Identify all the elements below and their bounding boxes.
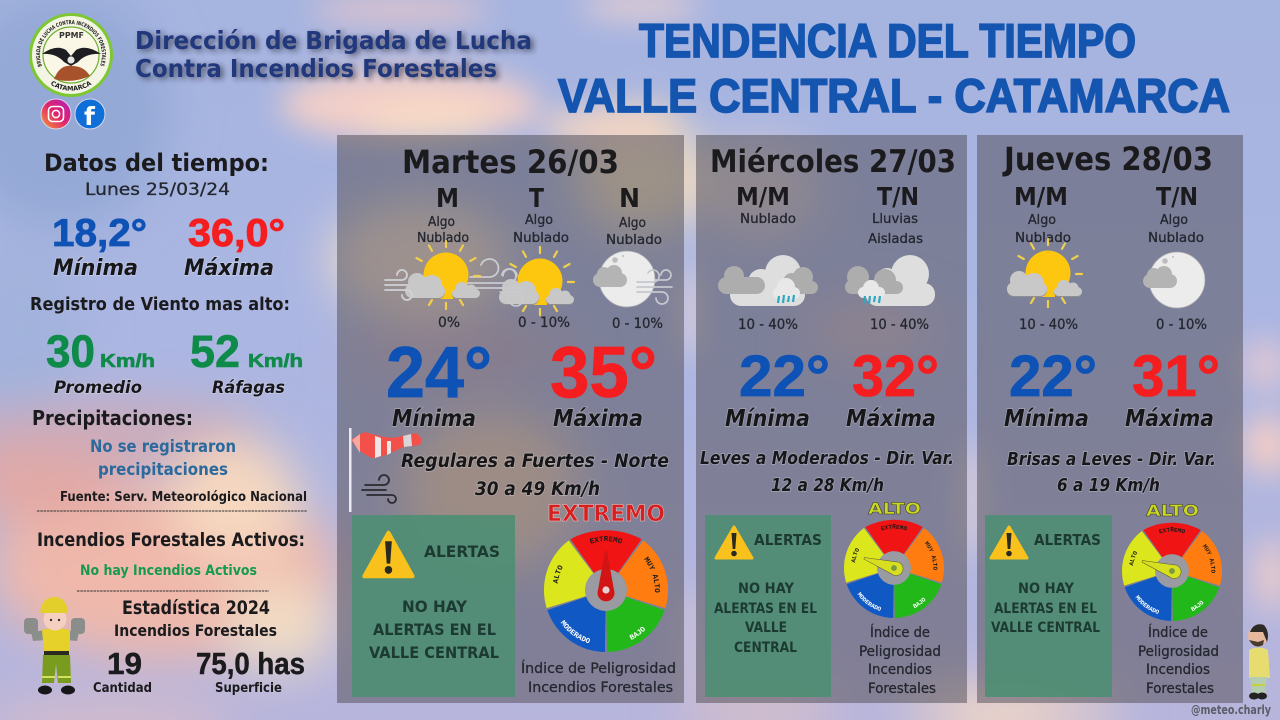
fire danger label: ALTO xyxy=(868,499,921,518)
precipitation text: precipitaciones xyxy=(98,460,228,479)
forecast: mañana: Nublado xyxy=(417,231,469,246)
title xyxy=(558,14,1230,122)
gauge: fire danger: MODERADO xyxy=(858,592,881,611)
heading: incendios activos: Incendios Forestales Activos: xyxy=(37,529,305,551)
max temperature: Máxima xyxy=(553,406,643,432)
forecast: manana mediodia: 10 - 40% xyxy=(738,317,798,333)
stat: cantidad: Cantidad xyxy=(93,681,152,696)
wind text xyxy=(401,451,669,500)
organisation heading: Contra Incendios Forestales xyxy=(135,54,497,83)
min temperature: 22° xyxy=(739,344,830,409)
wind text: 12 a 28 Km/h xyxy=(771,476,884,496)
alert text: CENTRAL xyxy=(734,640,797,656)
alert heading: ALERTAS xyxy=(754,531,822,549)
icon: facebook: f xyxy=(84,102,96,131)
alert heading: ALERTAS xyxy=(1034,531,1101,549)
forecast: mañana: M xyxy=(436,184,459,214)
alert text xyxy=(369,597,499,662)
temperature minimum: 18,2° xyxy=(52,212,147,255)
alert text: NO HAY xyxy=(402,597,467,616)
alert text: NO HAY xyxy=(1018,581,1075,597)
forecast: mañana: 0% xyxy=(438,315,460,331)
forecast: tarde noche xyxy=(1143,182,1207,333)
gauge caption: Incendios xyxy=(868,662,932,678)
forecast: tarde: 0 - 10% xyxy=(518,315,570,331)
alert text: VALLE xyxy=(745,620,787,636)
forecast: tarde noche: Lluvias xyxy=(872,212,918,227)
temperature minimum xyxy=(52,212,147,281)
wind average: Promedio xyxy=(54,378,142,398)
heading: datos del tiempo: Datos del tiempo: xyxy=(44,149,269,177)
max temperature: 35° xyxy=(550,333,657,413)
temperature maximum: Máxima xyxy=(184,256,274,281)
wind gusts: Ráfagas xyxy=(212,378,285,398)
gauge caption xyxy=(1138,624,1219,697)
alert box xyxy=(985,515,1112,697)
max temperature: Máxima xyxy=(846,406,936,432)
min temperature: 22° xyxy=(1009,344,1097,409)
wind text: 30 a 49 Km/h xyxy=(475,479,600,500)
gauge: fire danger xyxy=(1122,522,1222,621)
forecast: tarde: Algo xyxy=(525,213,553,228)
min temperature xyxy=(725,344,830,432)
logo: Brigada de Lucha: BRIGADA DE LUCHA CONTRA INCENDIOS FORESTALES xyxy=(36,20,106,67)
panel: datos del tiempo xyxy=(24,149,307,696)
gauge: fire danger: MUY ALTO xyxy=(924,541,938,570)
forecast: noche: 0 - 10% xyxy=(612,316,663,332)
gauge: fire danger xyxy=(544,530,668,652)
heading: precipitaciones: Precipitaciones: xyxy=(32,406,193,430)
min temperature: Mínima xyxy=(1004,406,1089,432)
panel: jueves xyxy=(977,135,1243,703)
icon: firefighter xyxy=(24,597,85,694)
gauge caption: Peligrosidad xyxy=(1138,644,1219,660)
heading: viento: Registro de Viento mas alto: xyxy=(30,294,290,315)
heading: Martes: Martes 26/03 xyxy=(402,143,619,181)
gauge: fire danger: MUY ALTO xyxy=(1202,544,1216,573)
forecast: manana mediodia: M/M xyxy=(736,182,790,211)
gauge: fire danger xyxy=(844,520,944,618)
gauge: fire danger: ALTO xyxy=(1129,551,1137,566)
gauge: fire danger: MUY ALTO xyxy=(644,556,660,592)
icon: facebook xyxy=(75,99,105,131)
forecast: tarde noche: 10 - 40% xyxy=(870,317,929,333)
organisation heading: Dirección de Brigada de Lucha xyxy=(135,26,532,55)
gauge caption: Incendios Forestales xyxy=(528,680,673,696)
gauge: fire danger: EXTREMO xyxy=(880,524,907,530)
gauge caption: Índice de xyxy=(870,624,930,641)
alert text: ALERTAS EN EL xyxy=(373,620,496,639)
active fires text: No hay Incendios Activos xyxy=(80,563,257,579)
max temperature: 31° xyxy=(1132,344,1220,409)
logo: Brigada de Lucha xyxy=(29,13,113,97)
alert text: VALLE CENTRAL xyxy=(369,643,499,662)
icon: warning triangle xyxy=(364,533,413,576)
gauge: fire danger: BAJO xyxy=(629,626,645,640)
gauge: fire danger: EXTREMO xyxy=(1158,527,1185,534)
gauge: fire danger: BAJO xyxy=(912,598,926,608)
forecast: tarde noche: T/N xyxy=(877,182,919,211)
forecast: manana mediodia: Algo xyxy=(1028,213,1056,228)
alert text: ALERTAS EN EL xyxy=(714,601,817,617)
max temperature: 32° xyxy=(852,344,939,409)
icon: warning triangle xyxy=(991,527,1027,558)
max temperature: Máxima xyxy=(1125,406,1214,432)
wind average: 30 xyxy=(46,326,95,377)
panel: miercoles xyxy=(696,135,967,703)
alert text: NO HAY xyxy=(738,581,795,597)
wind average xyxy=(46,326,155,398)
gauge caption: Peligrosidad xyxy=(859,644,941,660)
gauge: fire danger: MODERADO xyxy=(560,620,590,643)
gauge caption: Forestales xyxy=(1146,681,1214,697)
icon: windsock xyxy=(349,428,421,512)
forecast: noche: Nublado xyxy=(606,233,662,248)
alert text: VALLE CENTRAL xyxy=(991,620,1100,636)
gauge caption: Índice de Peligrosidad xyxy=(521,660,676,677)
wind text: 6 a 19 Km/h xyxy=(1057,476,1160,496)
forecast: noche: N xyxy=(619,184,640,214)
min temperature: 24° xyxy=(386,333,492,413)
wind text: Regulares a Fuertes - Norte xyxy=(401,451,669,472)
gauge: fire danger: BAJO xyxy=(1190,600,1204,612)
gauge: fire danger: MODERADO xyxy=(1136,595,1159,614)
precipitation text: No se registraron xyxy=(90,437,236,456)
min temperature: Mínima xyxy=(392,406,476,432)
wind text: Brisas a Leves - Dir. Var. xyxy=(1007,450,1216,470)
alert text xyxy=(714,581,817,656)
wind gusts: Km/h xyxy=(248,351,303,371)
panel: martes xyxy=(337,135,684,703)
forecast: tarde noche: Aisladas xyxy=(868,232,923,247)
fire danger label: ALTO xyxy=(1146,501,1199,520)
min temperature: Mínima xyxy=(725,406,810,432)
gauge caption: Índice de xyxy=(1148,624,1208,641)
temperature maximum xyxy=(184,212,285,281)
wind text: Leves a Moderados - Dir. Var. xyxy=(700,449,954,469)
alert text xyxy=(991,581,1100,636)
forecast: mañana xyxy=(385,184,516,331)
alert box xyxy=(705,515,831,697)
forecast: tarde xyxy=(499,184,574,331)
wind gusts xyxy=(190,326,303,398)
alert box xyxy=(352,515,515,697)
alert text: ALERTAS EN EL xyxy=(994,601,1097,617)
source: Fuente: Serv. Meteorológico Nacional xyxy=(60,489,307,505)
stat: cantidad: 19 xyxy=(107,646,142,681)
icon: warning triangle xyxy=(716,527,752,558)
stat: superficie: 75,0 has xyxy=(196,646,305,681)
heading: estadistica: Incendios Forestales xyxy=(114,621,277,640)
gauge caption: Incendios xyxy=(1146,662,1210,678)
min temperature xyxy=(1004,344,1097,432)
forecast: tarde noche: Nublado xyxy=(1148,231,1204,246)
forecast: mañana: Algo xyxy=(428,215,455,230)
title: TENDENCIA DEL TIEMPO xyxy=(639,14,1136,67)
max temperature xyxy=(846,344,939,432)
forecast: noche: Algo xyxy=(619,216,646,231)
forecast: tarde: T xyxy=(529,184,544,214)
gauge: fire danger: ALTO xyxy=(553,565,562,584)
forecast: tarde: Nublado xyxy=(513,231,569,246)
forecast: manana mediodia: M/M xyxy=(1014,182,1068,211)
icon: author character xyxy=(1248,624,1270,700)
max temperature xyxy=(1125,344,1220,432)
forecast: manana mediodia xyxy=(718,182,818,333)
heading: datos del tiempo xyxy=(44,149,269,200)
logo: Brigada de Lucha: CATAMARCA xyxy=(51,81,92,91)
forecast: manana mediodia: Nublado xyxy=(740,212,796,227)
gauge: fire danger: ALTO xyxy=(851,548,859,563)
icon: instagram xyxy=(41,99,71,129)
temperature minimum: Mínima xyxy=(53,256,138,281)
logo: Brigada de Lucha: PPMF xyxy=(59,31,84,40)
temperature maximum: 36,0° xyxy=(188,212,285,255)
fire danger label: EXTREMO xyxy=(547,502,665,527)
title: VALLE CENTRAL - CATAMARCA xyxy=(558,69,1230,122)
heading: estadistica: Estadística 2024 xyxy=(122,598,270,619)
stat: cantidad xyxy=(93,646,152,696)
alert heading: ALERTAS xyxy=(424,542,500,561)
gauge: fire danger: EXTREMO xyxy=(590,536,622,544)
heading: Jueves: Jueves 28/03 xyxy=(1002,140,1213,178)
heading: estadistica xyxy=(114,598,277,640)
forecast: tarde noche: T/N xyxy=(1156,182,1198,211)
heading: datos del tiempo: Lunes 25/03/24 xyxy=(85,180,230,200)
wind gusts: 52 xyxy=(190,326,240,377)
gauge caption xyxy=(859,624,941,697)
wind text xyxy=(700,449,954,496)
forecast: noche xyxy=(593,184,672,332)
forecast: tarde noche: 0 - 10% xyxy=(1156,317,1207,333)
gauge caption: Forestales xyxy=(868,681,936,697)
wind text xyxy=(1007,450,1216,496)
forecast: manana mediodia: 10 - 40% xyxy=(1019,317,1078,333)
heading: Miercoles: Miércoles 27/03 xyxy=(710,144,956,180)
forecast: manana mediodia xyxy=(1007,182,1082,333)
gauge caption xyxy=(521,660,676,696)
icon: wind xyxy=(362,475,396,503)
organisation heading xyxy=(135,26,532,83)
forecast: manana mediodia: Nublado xyxy=(1015,231,1071,246)
precipitation text xyxy=(90,437,236,479)
forecast: tarde noche xyxy=(845,182,935,333)
wind average: Km/h xyxy=(100,351,155,371)
forecast: tarde noche: Algo xyxy=(1160,213,1188,228)
stat: superficie xyxy=(196,646,305,696)
stat: superficie: Superficie xyxy=(215,681,282,696)
